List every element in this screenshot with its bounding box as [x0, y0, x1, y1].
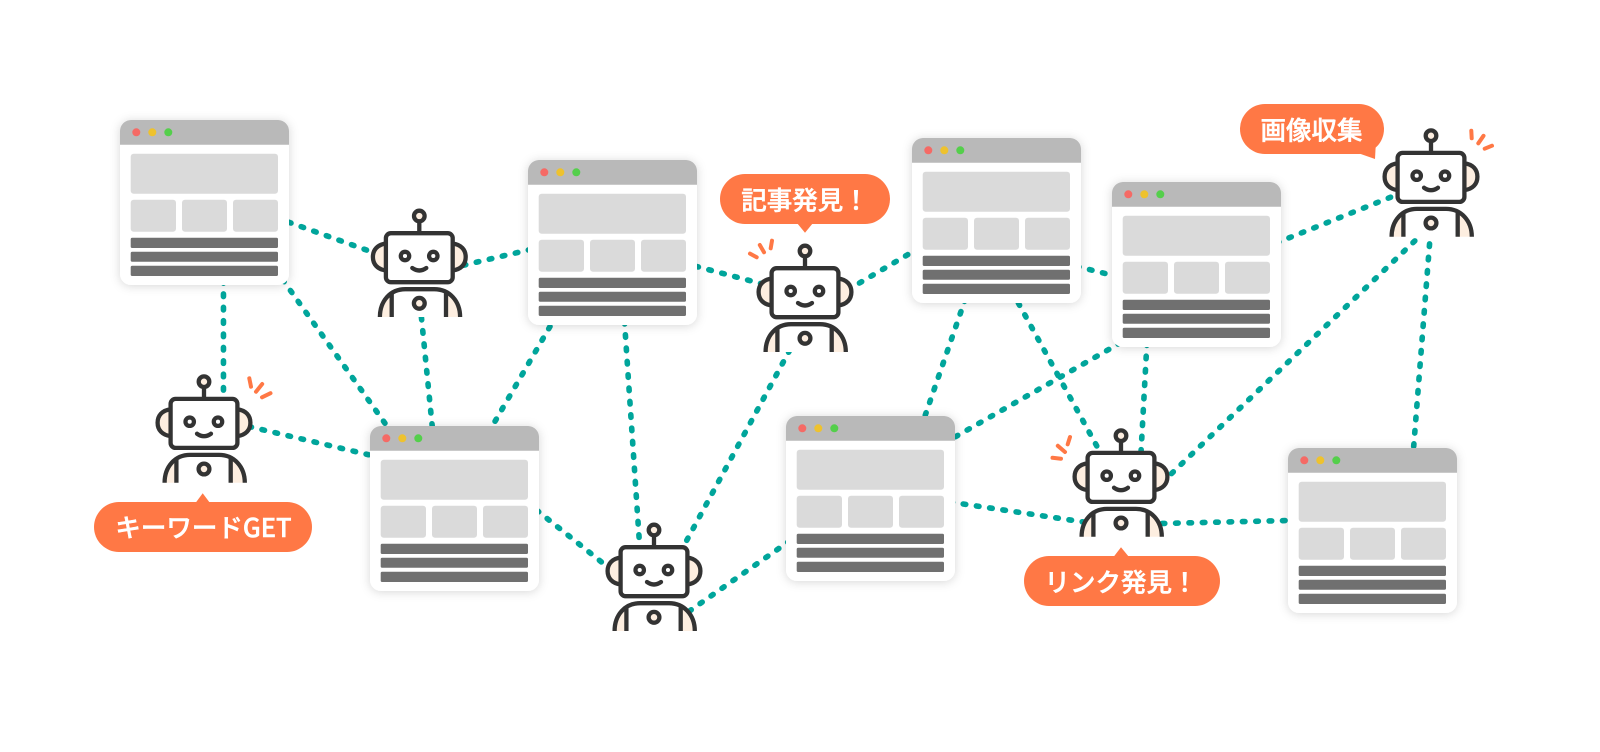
callout: image collection: 画像収集: [1260, 111, 1363, 148]
callout: article found: [720, 174, 890, 233]
icon: sparks near link robot: [1052, 437, 1070, 459]
callout: link found: [1024, 547, 1220, 606]
robot: image collector: [1385, 130, 1477, 237]
robot: article finder: [759, 246, 851, 352]
callout: image collection: [1240, 104, 1384, 159]
callout: keyword GET: [94, 493, 312, 552]
dotted network connections: [223, 194, 1431, 612]
robot: link finder: [1075, 430, 1167, 537]
browser window: centre lower: [786, 416, 955, 581]
browser window: centre upper: [528, 160, 697, 325]
icon: sparks near article robot: [750, 241, 772, 257]
robot: keyword finder: [158, 376, 250, 483]
browser window: centre right upper: [912, 138, 1081, 303]
browser window: centre left lower: [370, 426, 539, 591]
robot: top left: [373, 211, 466, 317]
robot: bottom centre: [608, 525, 700, 631]
browser window: right lower: [1288, 448, 1457, 613]
callout: article found: 記事発見！: [741, 181, 869, 218]
callout: link found: リンク発見！: [1044, 563, 1198, 600]
icon: sparks near image robot: [1471, 131, 1492, 149]
callout: keyword GET: キーワードGET: [115, 508, 292, 545]
icon: sparks near keyword robot: [249, 378, 270, 397]
browser window: top left: [120, 120, 289, 285]
browser window: right upper: [1112, 182, 1281, 347]
